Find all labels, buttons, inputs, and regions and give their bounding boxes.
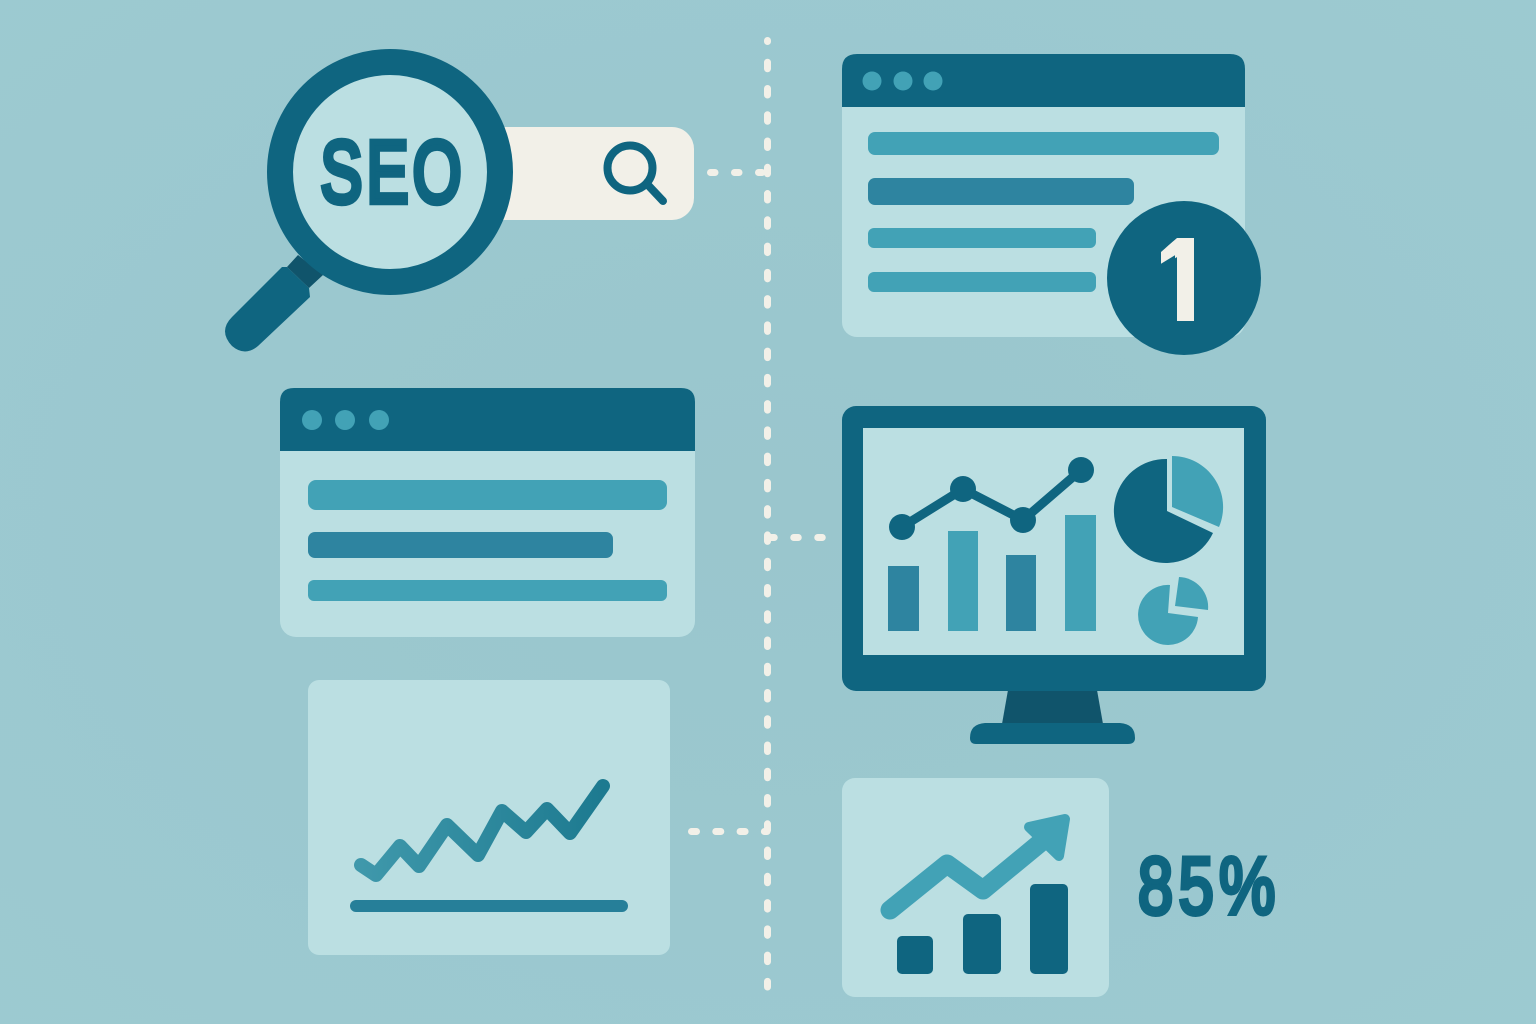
- monitor screen: [863, 428, 1244, 655]
- browser title bar: [280, 388, 695, 451]
- badge: rank number 1: [1107, 201, 1261, 355]
- monitor stand: [1002, 690, 1103, 724]
- icon: SEO magnifying glass: [225, 62, 500, 352]
- dashed connector: search bar to spine: [710, 169, 762, 176]
- panel: content browser window: [280, 388, 695, 637]
- dashed connector: trend panel to spine: [692, 828, 767, 835]
- monitor with analytics dashboard: [842, 406, 1266, 744]
- search bar: [480, 127, 694, 220]
- large pie chart: [1114, 456, 1223, 563]
- icon: small search glass: [608, 146, 663, 201]
- magnifier neck: [287, 255, 323, 288]
- badge: rank number 1: 1: [1148, 213, 1216, 347]
- SEO label: SEO: [320, 124, 466, 222]
- result bars: [868, 132, 1219, 292]
- magnifier lens: [280, 62, 500, 282]
- window dots: [862, 72, 942, 90]
- monitor base: [970, 723, 1135, 744]
- growth bars: [897, 884, 1068, 974]
- browser title bar: [842, 54, 1245, 107]
- infographic canvas: [225, 37, 1275, 997]
- panel: ranking browser window: [842, 54, 1261, 355]
- content bars: [308, 480, 667, 601]
- panel: growth chart card: [842, 778, 1109, 997]
- growth arrow: [890, 819, 1065, 910]
- magnifier handle: [225, 267, 310, 352]
- statistic: 85 percent: 85%: [1138, 841, 1281, 931]
- monitor frame: [842, 406, 1266, 691]
- small pie chart: [1138, 577, 1208, 645]
- line chart: [889, 457, 1094, 540]
- wavy trend line: [361, 786, 603, 875]
- dashed connector: vertical spine: [764, 40, 771, 987]
- baseline bar: [350, 900, 628, 912]
- window dots: [302, 410, 389, 430]
- dashed connector: spine to monitor: [770, 534, 822, 541]
- panel: traffic trend card: [308, 680, 670, 955]
- bar chart: [888, 515, 1096, 631]
